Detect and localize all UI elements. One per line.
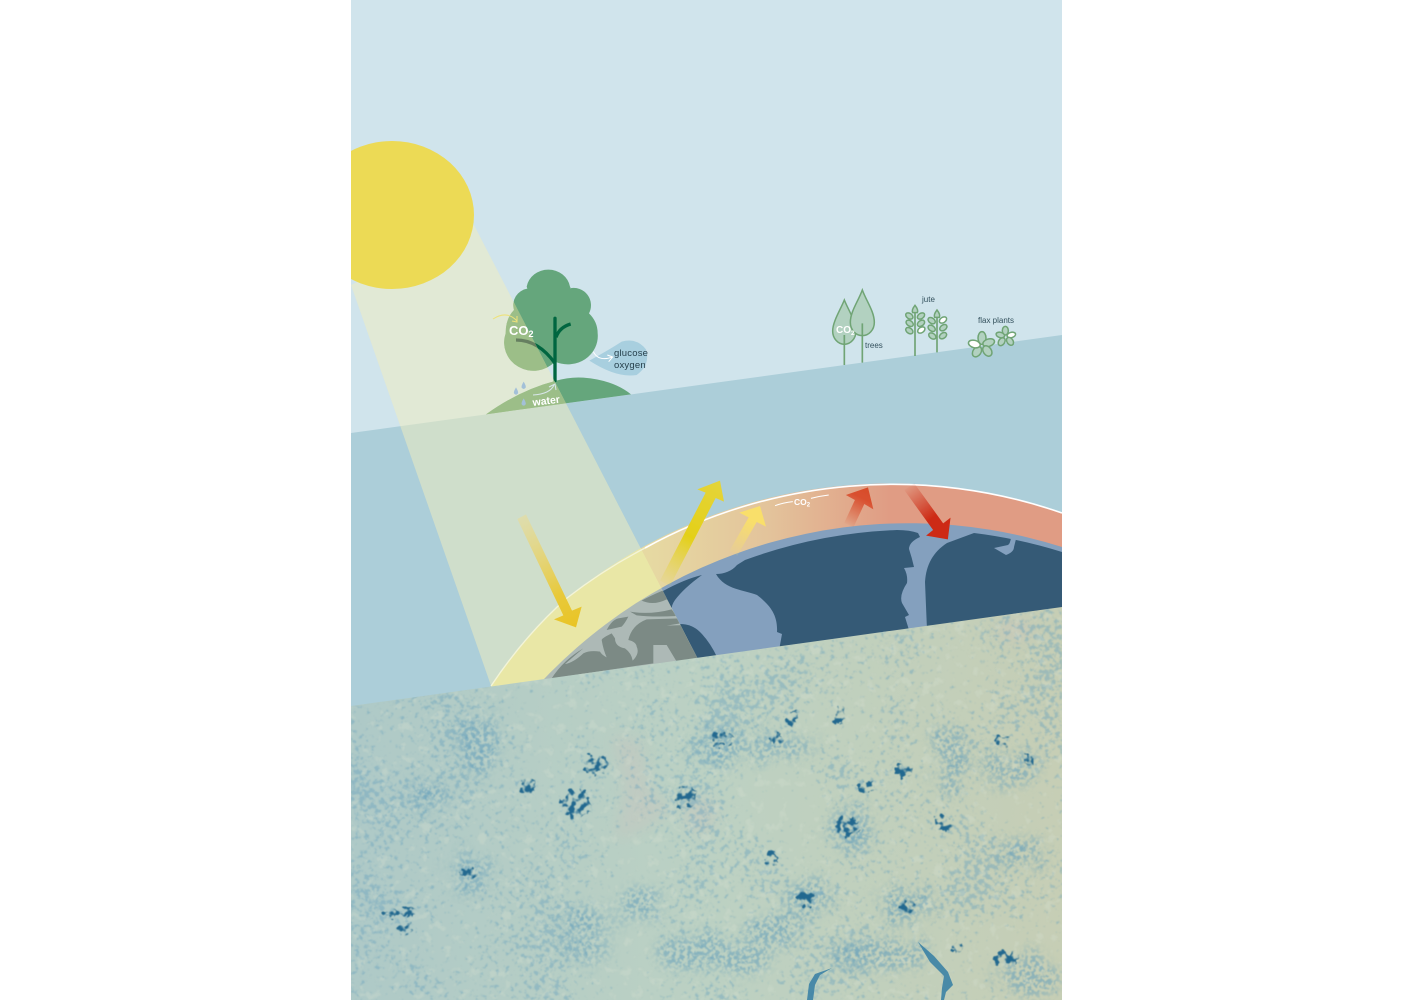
lower blue band bbox=[351, 335, 1062, 720]
label: CO2 in tree: 2 bbox=[851, 330, 855, 337]
radiation arrows group A bbox=[517, 481, 766, 627]
icon: CO2 arrow bbox=[493, 315, 517, 322]
infographic panel bbox=[310, 0, 1062, 1000]
sun bbox=[310, 141, 474, 289]
land: lower fragment bbox=[680, 624, 717, 660]
arrow: trapped heat returning bbox=[904, 483, 951, 539]
inland sea bbox=[994, 538, 1016, 555]
dark lakes bbox=[383, 705, 1036, 964]
light noise bbox=[351, 600, 1062, 1000]
label: trees: trees bbox=[865, 341, 883, 350]
grey landmass base bbox=[544, 588, 697, 679]
atmosphere inside sunbeam bbox=[492, 548, 698, 686]
label: CO2 in atmosphere: 2 bbox=[807, 502, 811, 508]
label: CO2 at tree: 2 bbox=[528, 329, 534, 339]
atmosphere outline bbox=[645, 484, 1062, 548]
arrow: incoming solar radiation bbox=[517, 514, 582, 627]
arrow: reflected radiation in atmosphere bbox=[729, 506, 766, 556]
plant scene: tree with photosynthesis bbox=[486, 270, 647, 414]
CO2 lines bbox=[775, 495, 829, 506]
tree and hill tint inside sunbeam bbox=[486, 302, 566, 414]
pink tint patches bbox=[612, 618, 1033, 840]
label: jute: jute bbox=[921, 295, 935, 304]
label: water: water bbox=[531, 394, 561, 409]
rivers bbox=[807, 942, 953, 1000]
sunlit land inside beam bbox=[544, 588, 697, 679]
arrow: outgoing heat bbox=[844, 487, 873, 527]
ground base bbox=[351, 600, 1062, 1000]
label: glucose: glucose bbox=[614, 348, 648, 359]
label: CO2 at tree: CO bbox=[509, 323, 528, 338]
sunbeam bbox=[351, 225, 719, 700]
glucose and oxygen leaf bbox=[589, 341, 647, 376]
icon: white arrow into leaf bbox=[593, 352, 613, 362]
icon: water arrow bbox=[533, 384, 556, 395]
tree crown bbox=[504, 270, 598, 371]
sky background bbox=[351, 0, 1062, 440]
dark land masses bbox=[660, 530, 1062, 660]
radiation arrows group B bbox=[775, 483, 951, 539]
arrow: reflected radiation to space bbox=[660, 481, 724, 586]
jute plants bbox=[905, 305, 948, 356]
mottled mid-blue zones bbox=[406, 715, 1060, 995]
atmosphere band bbox=[491, 484, 1062, 700]
speckled blue noise bbox=[351, 600, 1062, 1000]
hill bbox=[486, 377, 631, 414]
outline plants on the slope bbox=[833, 290, 1016, 365]
earth disc bbox=[662, 523, 1062, 656]
water drops bbox=[514, 382, 526, 406]
trees bbox=[833, 290, 874, 365]
land: right continent bbox=[925, 533, 1062, 630]
label: flax plants: flax plants bbox=[978, 316, 1014, 325]
land: central continent bbox=[716, 530, 920, 655]
atmosphere outline inside beam bbox=[491, 548, 645, 686]
tree trunk and branches bbox=[534, 316, 571, 382]
label: CO2 in atmosphere: CO bbox=[794, 497, 807, 507]
label: CO2 in tree: CO bbox=[836, 325, 851, 336]
label: oxygen: oxygen bbox=[614, 360, 646, 371]
satellite ground texture bbox=[351, 600, 1062, 1000]
grey land patches bbox=[552, 590, 697, 678]
flax flowers bbox=[968, 326, 1016, 359]
land: left fragment bbox=[663, 575, 702, 608]
